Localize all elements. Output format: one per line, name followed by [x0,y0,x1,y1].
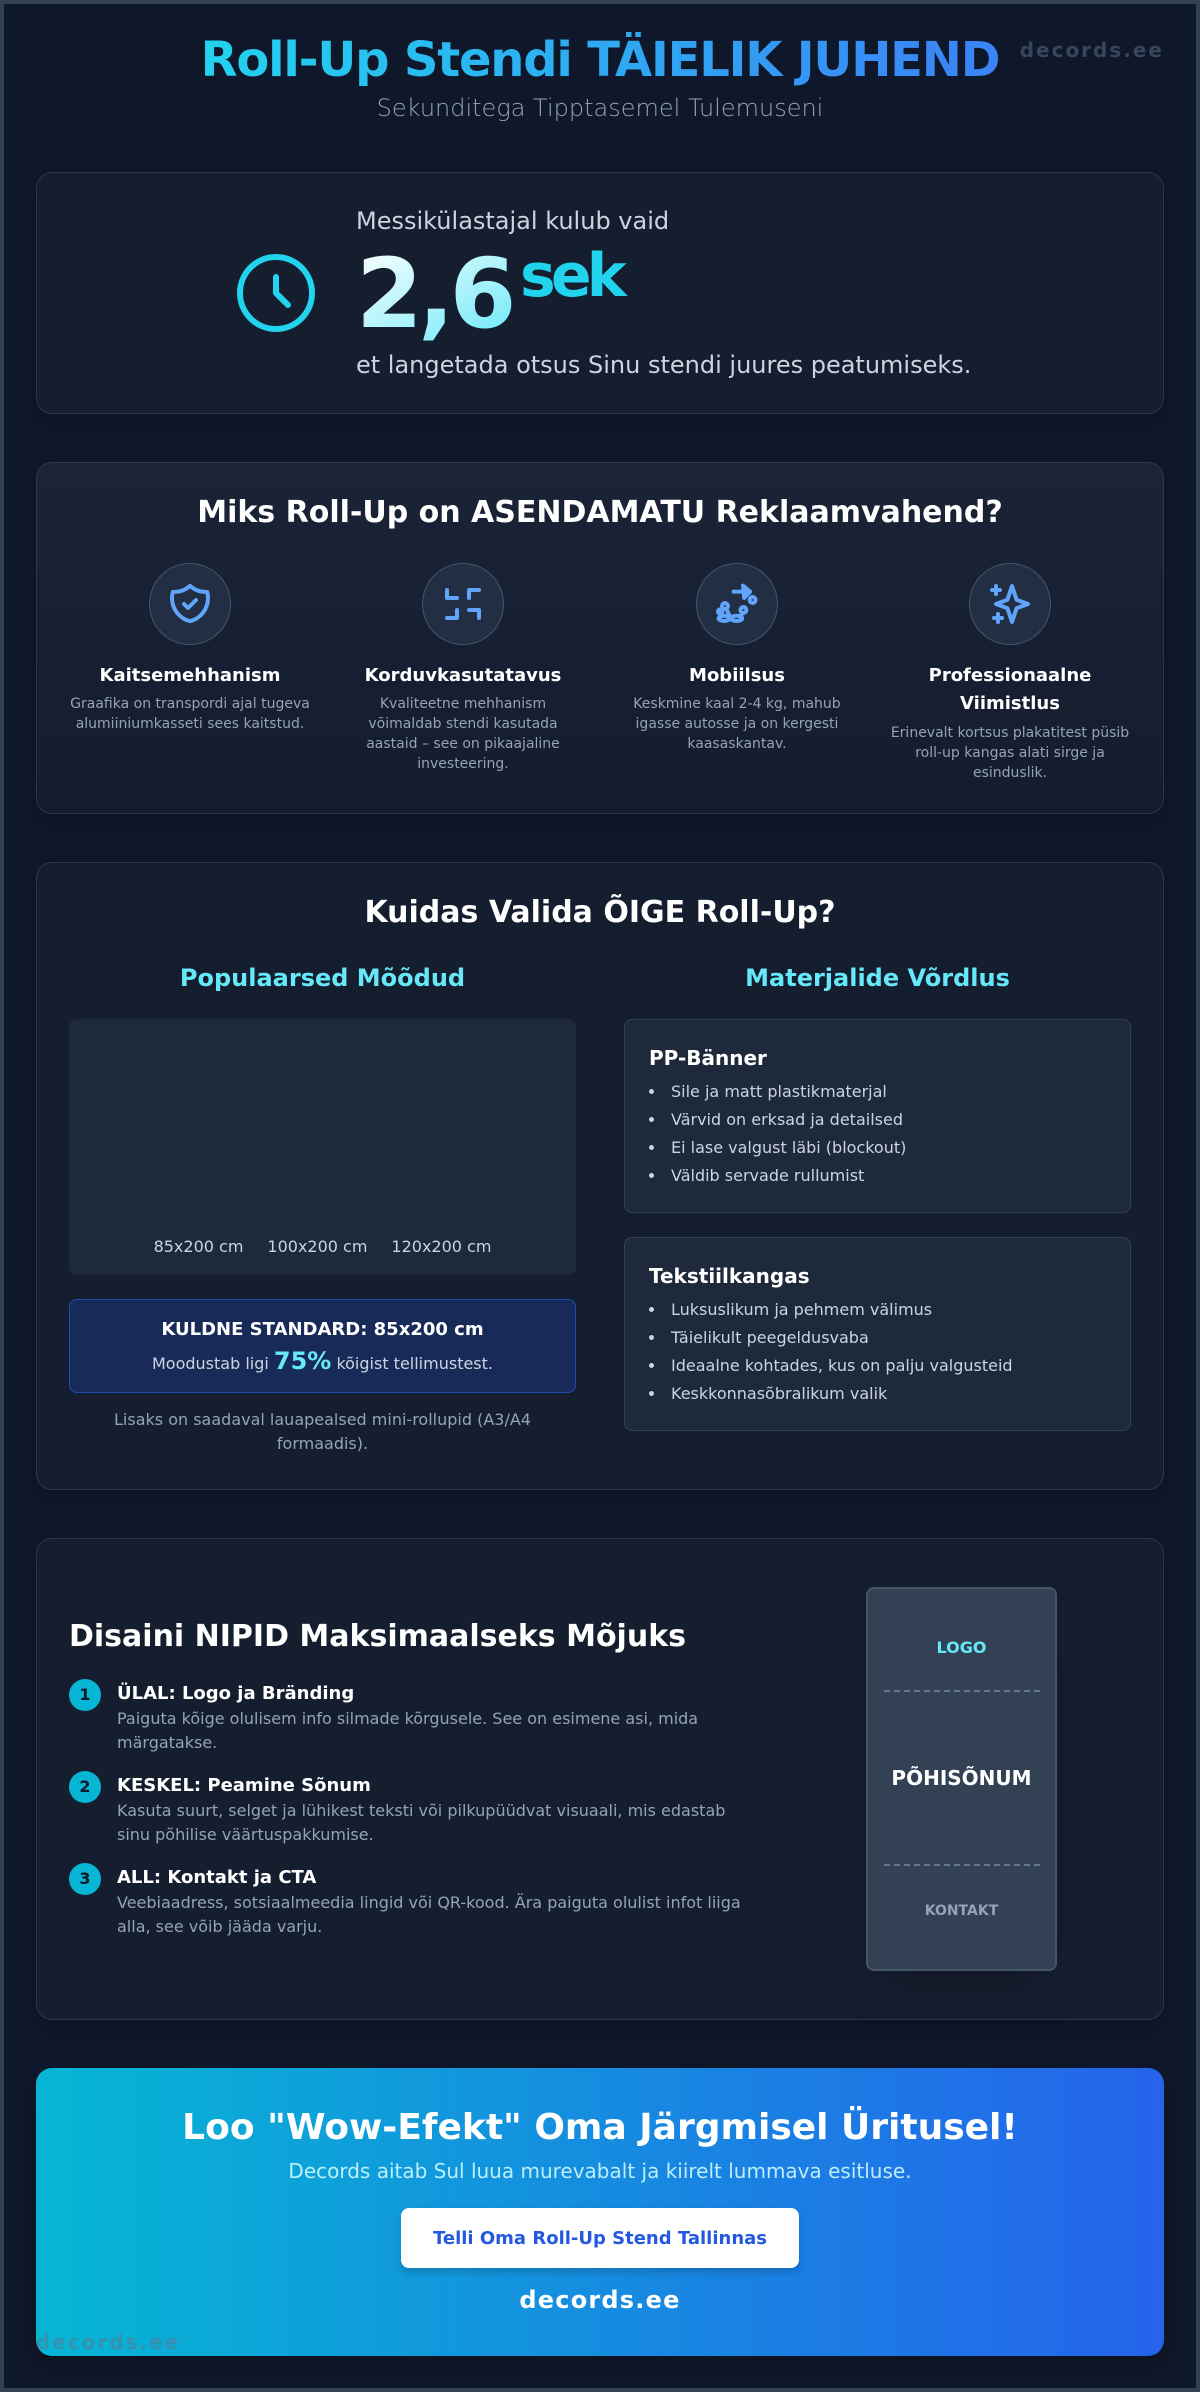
feature: Professionaalne Viimistlus [891,563,1129,781]
feature description: igasse autosse ja on kergesti [636,716,838,732]
step number: 1 [79,1685,91,1704]
size labels: 100x200 cm [267,1237,367,1256]
step 1 [69,1679,698,1752]
icon: shield [149,563,231,645]
feature title [929,665,1091,714]
panel: why roll-up [36,462,1164,814]
CTA text: Decords aitab Sul luua murevabalt ja kiirelt lummava esitluse. [288,2159,912,2183]
icon: clock [237,254,315,332]
material title: Tekstiilkangas [649,1264,810,1288]
material card: Tekstiilkangas [624,1237,1131,1431]
material list: Ei lase valgust läbi (blockout) [671,1138,906,1157]
feature title: Korduvkasutatavus [365,665,561,686]
step description [117,1801,725,1844]
subheading: materials: Materjalide Võrdlus [745,964,1010,992]
feature description [70,696,310,732]
feature description [366,696,560,772]
feature description: kaasaskantav. [687,736,787,752]
feature description: investeering. [417,756,509,772]
step description: alla, see võib jääda varju. [117,1917,322,1936]
size labels [154,1237,491,1256]
step title: KESKEL: Peamine Sõnum [117,1775,371,1796]
stat lead-in text: Messikülastajal kulub vaid [356,207,669,235]
note: mini rollups: Lisaks on saadaval lauapealsed mini-rollupid (A3/A4 [114,1410,531,1429]
step 2 [69,1771,725,1844]
callout: gold standard [69,1299,576,1393]
feature description: Erinevalt kortsus plakatitest püsib [891,725,1129,741]
stat value: 2,6 sek [356,238,628,350]
feature description: roll-up kangas alati sirge ja [915,745,1105,761]
material title: PP-Bänner [649,1046,767,1070]
callout text: Moodustab ligi 75% kõigist tellimustest. [152,1347,493,1375]
CTA website: decords.ee [519,2286,681,2314]
feature title: Kaitsemehhanism [100,665,280,686]
material list [649,1300,1013,1403]
step description: Kasuta suurt, selget ja lühikest teksti või pilkupüüdvat visuaali, mis edastab [117,1801,725,1820]
subheading: sizes: Populaarsed Mõõdud [180,964,465,992]
panel: key statistic [36,172,1164,414]
note: mini rollups: formaadis). [277,1434,368,1453]
feature description [633,696,841,752]
stat value: 2,6 sek: sek [520,241,622,311]
feature: Mobiilsus [633,563,841,752]
step description: märgatakse. [117,1733,217,1752]
material list [649,1082,906,1185]
panel: design tips [36,1538,1164,2020]
subtitle: Sekunditega Tipptasemel Tulemuseni [377,94,823,122]
title: Roll-Up Stendi TÄIELIK JUHEND [201,32,999,88]
feature title: Viimistlus [960,693,1060,714]
feature title: Mobiilsus [689,665,785,686]
material list: Täielikult peegeldusvaba [671,1328,869,1347]
feature description: Graafika on transpordi ajal tugeva [70,696,310,712]
step description [117,1709,698,1752]
banner zone: contact: KONTAKT [925,1903,998,1919]
banner zone: logo: LOGO [937,1638,986,1657]
step description [117,1893,741,1936]
note: mini rollups [114,1410,531,1453]
roll-up banner diagram [866,1587,1057,1971]
CTA heading: Loo "Wow-Efekt" Oma Järgmisel Üritusel! [182,2107,1018,2148]
step description: Paiguta kõige olulisem info silmade kõrgusele. See on esimene asi, mida [117,1709,698,1728]
step number: 2 [79,1777,91,1796]
feature description [891,725,1129,781]
step number [69,1679,101,1711]
feature description: Kvaliteetne mehhanism [380,696,546,712]
stat closing text: et langetada otsus Sinu stendi juures peatumiseks. [356,351,971,379]
callout title: KULDNE STANDARD: 85x200 cm [161,1319,484,1340]
material list: Värvid on erksad ja detailsed [671,1110,903,1129]
material list: Keskkonnasõbralikum valik [671,1384,887,1403]
panel: call to action [36,2068,1164,2356]
feature description: esinduslik. [973,765,1047,781]
material card: PP-Bänner [624,1019,1131,1213]
icon: sparkles [969,563,1051,645]
step description: Veebiaadress, sotsiaalmeedia lingid või QR-kood. Ära paiguta olulist infot liiga [117,1893,741,1912]
step number: 3 [79,1869,91,1888]
heading: Disaini NIPID Maksimaalseks Mõjuks [69,1619,686,1654]
watermark: top right: decords.ee [1020,38,1164,62]
icon: corners [422,563,504,645]
material list: Ideaalne kohtades, kus on palju valgusteid [671,1356,1013,1375]
watermark: bottom left: decords.ee [36,2330,180,2354]
feature description: võimaldab stendi kasutada [368,716,558,732]
heading: Kuidas Valida ÕIGE Roll-Up? [364,895,836,930]
feature description: alumiiniumkasseti sees kaitstud. [76,716,304,732]
feature: Kaitsemehhanism [70,563,310,732]
feature description: aastaid – see on pikaajaline [366,736,560,752]
size labels: 85x200 cm [154,1237,243,1256]
step title: ÜLAL: Logo ja Bränding [117,1683,354,1704]
size chart panel [69,1019,576,1275]
step 3 [69,1863,741,1936]
stat value: 2,6 sek: 2,6 [356,238,512,350]
banner zone: main message: PÕHISÕNUM [891,1766,1032,1790]
feature: Korduvkasutatavus [365,563,561,772]
CTA button: Telli Oma Roll-Up Stend Tallinnas [433,2228,767,2249]
icon: mobility [696,563,778,645]
heading: Miks Roll-Up on ASENDAMATU Reklaamvahend? [197,495,1003,530]
feature description: Keskmine kaal 2-4 kg, mahub [633,696,841,712]
material list: Luksuslikum ja pehmem välimus [671,1300,932,1319]
feature title: Professionaalne [929,665,1091,686]
step number [69,1863,101,1895]
step description: sinu põhilise väärtuspakkumise. [117,1825,374,1844]
panel: how to choose [36,862,1164,1490]
material list: Sile ja matt plastikmaterjal [671,1082,887,1101]
step number [69,1771,101,1803]
CTA button [401,2208,799,2268]
material list: Väldib servade rullumist [671,1166,864,1185]
step title: ALL: Kontakt ja CTA [117,1867,316,1888]
size labels: 120x200 cm [391,1237,491,1256]
